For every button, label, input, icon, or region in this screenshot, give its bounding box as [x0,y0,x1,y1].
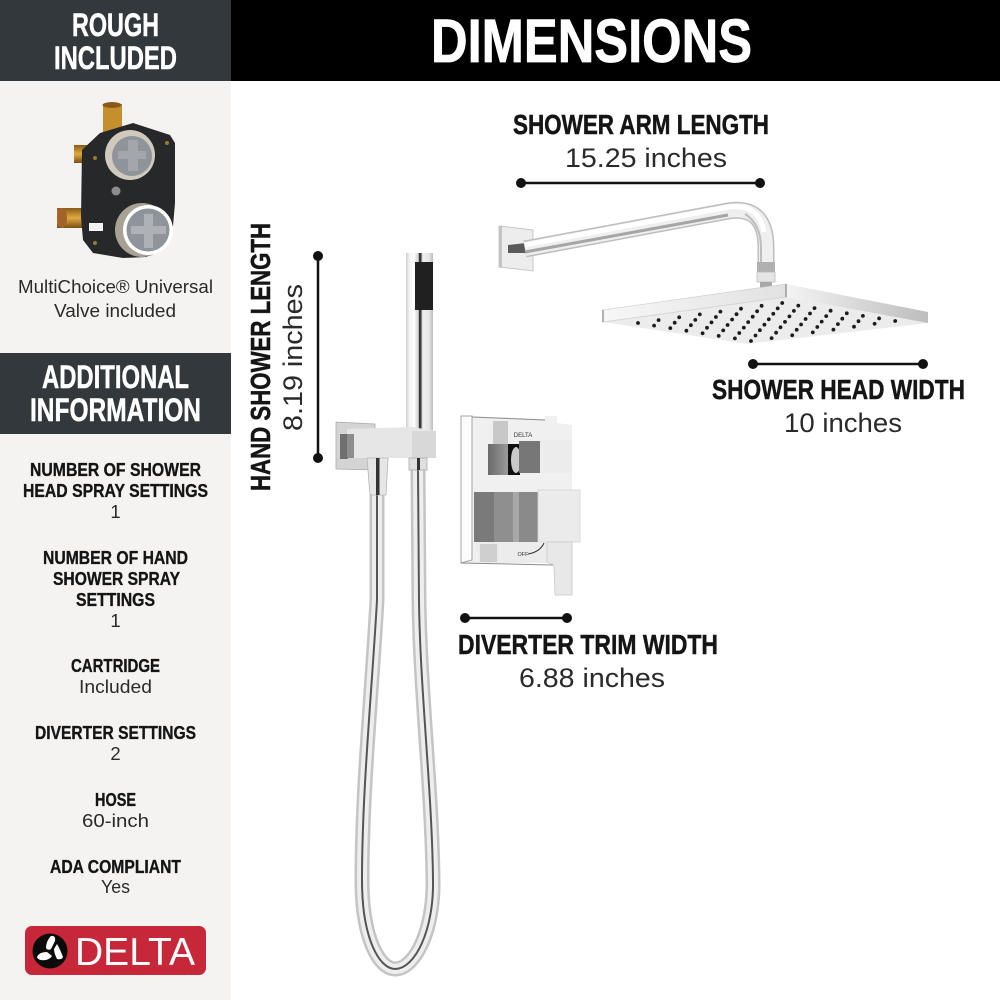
dimension: diverter trim width [458,613,718,693]
spec: ada compliant: ADA COMPLIANT [50,856,182,877]
dimension: shower arm length: SHOWER ARM LENGTH [513,109,769,140]
spec: number of shower head spray settings: 1 [110,501,121,522]
hose [362,470,433,969]
diverter trim [461,416,580,595]
spec: number of hand shower spray settings: 1 [110,610,121,631]
title: dimensions [231,0,1000,81]
dimension: shower arm length: 15.25 inches [565,143,727,173]
dimension: shower head width: 10 inches [784,408,902,438]
hand shower and wall bracket [336,253,436,495]
dimension: diverter trim width: 6.88 inches [519,663,665,693]
spec: cartridge: CARTRIDGE [71,655,160,676]
spec: number of shower head spray settings [23,459,208,522]
header: rough included: INCLUDED [54,40,177,76]
spec: number of hand shower spray settings: SHOWER SPRAY [53,568,181,589]
spec: hose: 60-inch [82,810,149,831]
dimension: hand shower length: HAND SHOWER LENGTH [245,223,276,491]
header: additional information: ADDITIONAL [42,359,189,395]
logo: delta: DELTA [75,931,195,974]
shower arm and head [499,207,928,344]
valve caption: Valve included [54,300,176,321]
icon: multichoice universal valve [57,102,175,258]
spec: cartridge [71,655,160,697]
header: rough included [0,0,231,81]
spec: ada compliant [50,856,182,897]
spec: number of shower head spray settings: NUMBER OF SHOWER [30,459,201,480]
spec: cartridge: Included [79,676,152,697]
title: dimensions: DIMENSIONS [431,7,752,75]
spec: hose [82,789,149,831]
spec: diverter settings: DIVERTER SETTINGS [35,722,196,743]
spec: number of hand shower spray settings [43,547,188,631]
sidebar panel background [0,81,231,1000]
dimension: hand shower length: 8.19 inches [278,284,308,431]
dimension: hand shower length [245,223,323,491]
header: additional information: INFORMATION [30,392,201,428]
spec: number of hand shower spray settings: SETTINGS [76,589,155,610]
header: additional information [0,353,231,434]
dimension: shower head width [712,359,965,438]
spec: diverter settings [35,722,196,764]
spec: number of hand shower spray settings: NUMBER OF HAND [43,547,188,568]
valve caption [18,276,213,321]
logo: delta [25,926,206,975]
dimension: shower arm length [513,109,769,188]
header: rough included: ROUGH [72,7,159,43]
valve caption: MultiChoice® Universal [18,276,213,297]
spec: diverter settings: 2 [110,743,121,764]
diverter trim: DELTA [514,433,532,439]
diverter trim: OFF [518,552,529,558]
spec: ada compliant: Yes [101,876,130,897]
spec: hose: HOSE [95,789,136,810]
spec: number of shower head spray settings: HEAD SPRAY SETTINGS [23,480,208,501]
dimension: diverter trim width: DIVERTER TRIM WIDTH [458,629,718,660]
